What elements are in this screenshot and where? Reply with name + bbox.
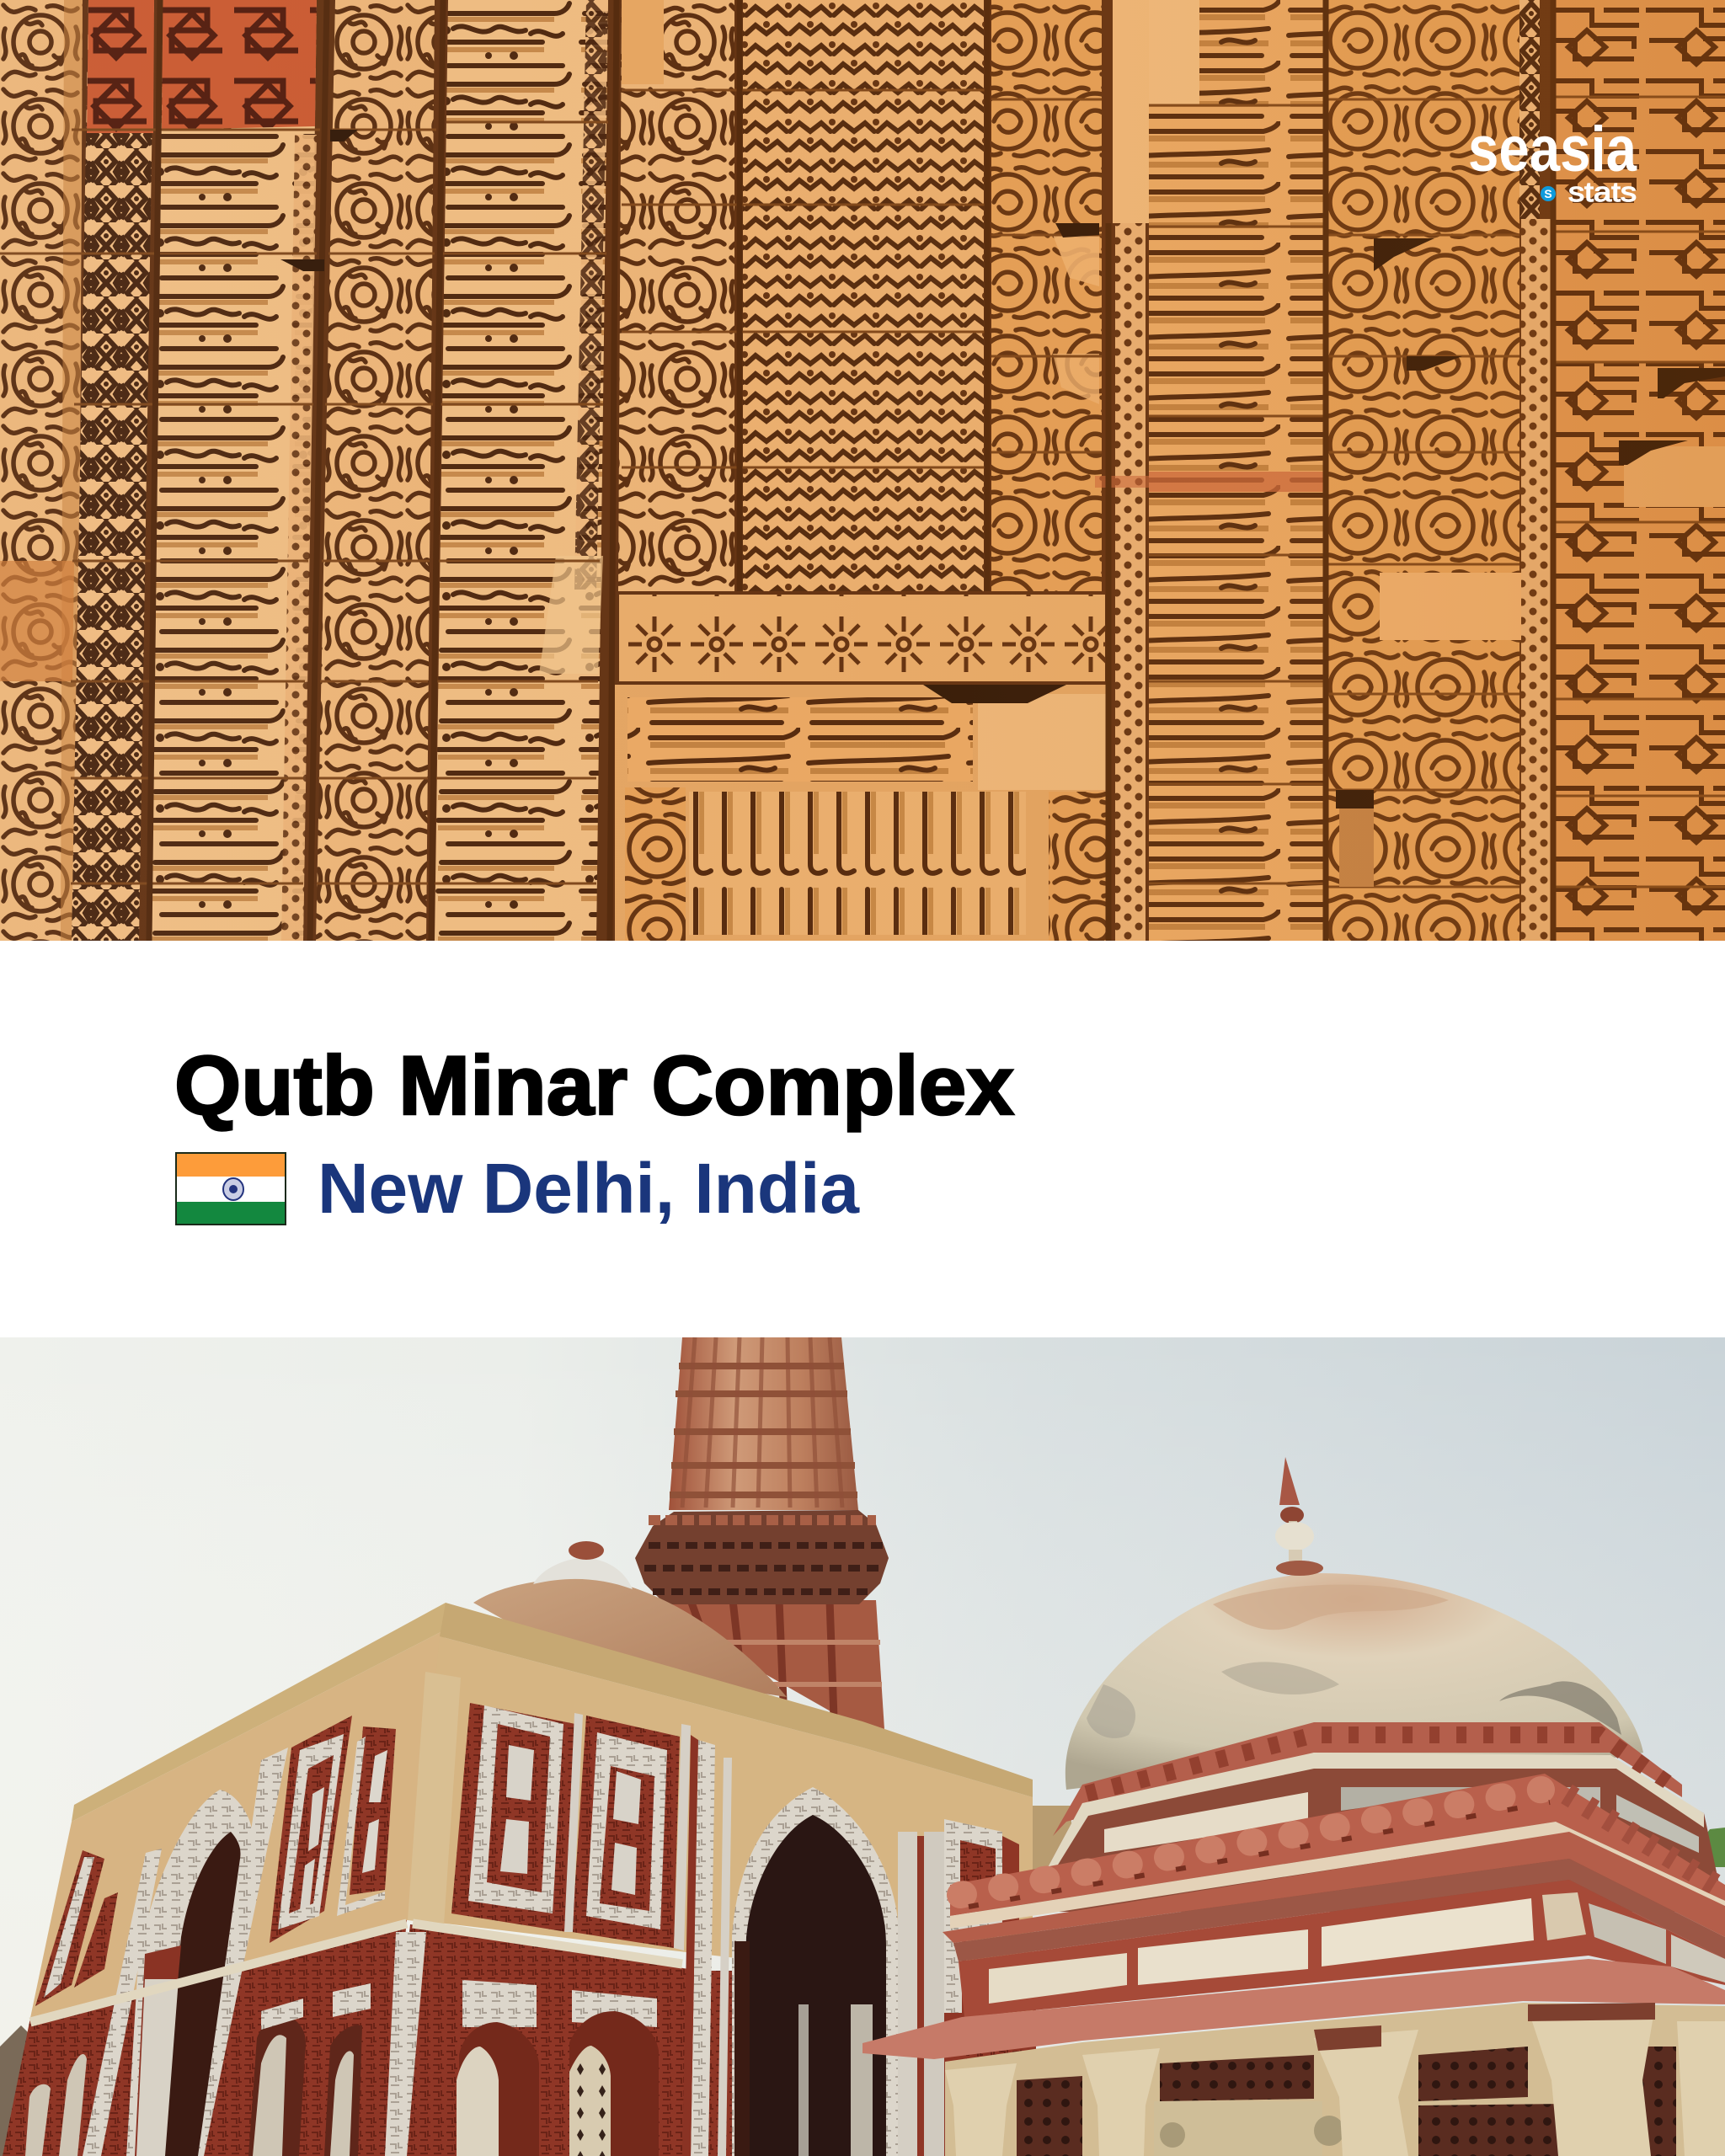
crenellated cornice upper bbox=[1053, 1722, 1682, 1836]
tan wall beyond tomb bbox=[1033, 1806, 1071, 1873]
column: narrow dotted band bbox=[1113, 0, 1155, 941]
subtitle: New Delhi, India: New Delhi, India bbox=[318, 1149, 860, 1228]
vertical marble strips bbox=[564, 1713, 732, 2156]
Qutb Minar tower bbox=[635, 1337, 889, 1729]
trees at right edge bbox=[1699, 1828, 1725, 1867]
merlon band bbox=[950, 1774, 1725, 1916]
tomb finial bbox=[1275, 1457, 1323, 1576]
pale strip under merlons bbox=[950, 1822, 1725, 1929]
red ledge bbox=[943, 1832, 1725, 1943]
small dome bbox=[473, 1541, 787, 1697]
tomb dome bbox=[1065, 1573, 1643, 1790]
warm tone overlay bbox=[0, 0, 1725, 941]
column: kufic knot panels bbox=[1554, 0, 1725, 941]
lower left facade bbox=[3, 1919, 407, 2156]
white cap and finial bbox=[533, 1541, 633, 1589]
right arch bbox=[732, 1787, 899, 2156]
column: arabesque with broken blocks bbox=[1327, 0, 1523, 941]
column: arabesque roundels bbox=[316, 0, 435, 941]
canopy bbox=[862, 1959, 1725, 2059]
column: calligraphy panels with red block bbox=[152, 0, 317, 941]
column: calligraphy with lattice edge bbox=[435, 0, 608, 941]
column: tall calligraphy bbox=[1095, 0, 1324, 941]
right facade frame 2 bbox=[572, 1716, 680, 1948]
roof fascia left bbox=[72, 1603, 446, 1822]
building: Alai Darwaza bbox=[3, 1603, 1036, 2156]
icon: flag of India bbox=[176, 1153, 286, 1225]
lower right facade bbox=[385, 1924, 1036, 2156]
mid marble band bbox=[30, 1924, 682, 2022]
column: narrow lattice band bbox=[1519, 0, 1551, 941]
photo: Qutb Minar, Alai Darwaza and Imam Zamin tomb bbox=[0, 1337, 1725, 2156]
far left facade frames bbox=[35, 1850, 118, 2006]
left facade frames bbox=[270, 1716, 396, 1943]
corner pilaster bbox=[408, 1672, 461, 1924]
upper right wall bbox=[410, 1636, 1033, 2021]
frieze: floral band bbox=[619, 595, 1105, 681]
upper left wall bbox=[30, 1630, 446, 2018]
column: far-left carved pilaster bbox=[0, 0, 83, 941]
left arch with white ring bbox=[83, 1748, 288, 2156]
logo: seasia stats: stats bbox=[1568, 177, 1637, 207]
carved moulding bbox=[953, 1859, 1725, 1961]
title: Qutb Minar Complex: Qutb Minar Complex bbox=[174, 1038, 1014, 1132]
stone seams bbox=[0, 90, 1725, 887]
lower niches bbox=[25, 1980, 659, 2156]
column: lattice band bbox=[72, 0, 154, 941]
lower wall with marble panels bbox=[959, 1880, 1725, 2017]
logo: seasia stats bbox=[1468, 114, 1637, 207]
vertical corner strip bbox=[385, 1932, 426, 2156]
carved shadows bbox=[280, 130, 1725, 887]
photo: carved stone wall with calligraphy panels bbox=[0, 0, 1725, 941]
column: arabesque panel bbox=[618, 0, 734, 591]
panel: geometric lattice bbox=[743, 0, 984, 591]
logo: seasia stats: S bbox=[1544, 187, 1552, 200]
under canopy lattice and columns bbox=[945, 2003, 1725, 2156]
logo: seasia stats: seasia bbox=[1468, 114, 1637, 185]
title band bbox=[0, 941, 1725, 1337]
right facade frame 1 bbox=[451, 1703, 575, 1932]
white molding bbox=[1047, 1753, 1704, 1869]
panel: lower calligraphic panel bbox=[615, 685, 1110, 941]
columns bbox=[945, 2006, 1725, 2156]
roof fascia right bbox=[440, 1603, 1033, 1797]
tomb: Imam Zamin bbox=[862, 1457, 1725, 2156]
marble panels upper bbox=[1104, 1787, 1699, 1853]
column gaps bbox=[149, 0, 1553, 941]
upper wall bbox=[950, 1764, 1725, 1912]
ruin at left edge bbox=[0, 2025, 34, 2156]
sky bbox=[0, 1337, 1725, 2156]
column: arabesque right of lattice bbox=[991, 0, 1102, 591]
strips and frame right of arch bbox=[898, 1819, 1019, 2156]
